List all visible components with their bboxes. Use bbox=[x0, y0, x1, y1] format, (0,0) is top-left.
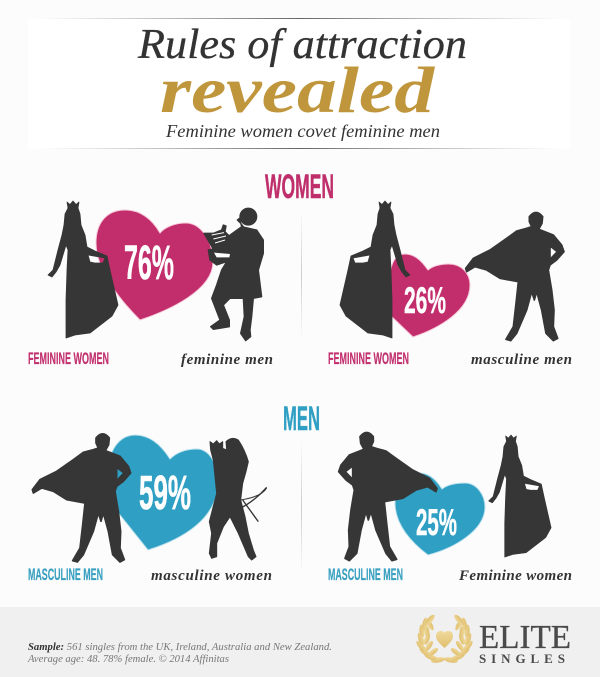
label: feminine women: FEMININE WOMEN bbox=[28, 350, 109, 368]
figure: archer bbox=[209, 438, 267, 560]
figure: princess bbox=[48, 201, 118, 338]
label: feminine men: feminine men bbox=[181, 352, 273, 368]
text: MEN bbox=[283, 400, 320, 438]
heading: women: WOMEN bbox=[265, 168, 334, 206]
icon: laurel wreath with heart bbox=[415, 613, 474, 664]
figure: caped hero bbox=[32, 434, 131, 562]
divider: men bbox=[301, 440, 302, 575]
sample note: Sample: 561 singles from the UK, Ireland, Australia and New Zealand. bbox=[28, 641, 332, 653]
label: feminine women: FEMININE WOMEN bbox=[328, 350, 409, 368]
percentage: 26%: 26% bbox=[404, 280, 446, 321]
percentage: 59%: 59% bbox=[139, 467, 191, 520]
divider: women bbox=[301, 210, 302, 340]
figure: caped hero bbox=[466, 212, 564, 341]
logo: elite singles bbox=[415, 613, 571, 666]
wordmark: ELITE bbox=[479, 619, 571, 656]
label: masculine men: masculine men bbox=[471, 352, 572, 368]
label: masculine men: MASCULINE MEN bbox=[328, 566, 403, 584]
wordmark subline: SINGLES bbox=[479, 651, 565, 666]
title: Rules of attraction bbox=[137, 22, 467, 68]
percentage: 25%: 25% bbox=[416, 502, 457, 543]
figure: caped hero bbox=[339, 432, 437, 561]
heart: 25% bbox=[395, 473, 485, 555]
sample note: Average age: 48. 78% female. © 2014 Affinitas bbox=[27, 653, 229, 665]
header panel bbox=[28, 18, 570, 149]
label: feminine women: Feminine women bbox=[458, 568, 572, 584]
sample note bbox=[27, 641, 332, 665]
panel: masculine men and feminine women bbox=[328, 432, 572, 584]
panel: masculine men and masculine women bbox=[28, 434, 272, 584]
label: masculine women: masculine women bbox=[151, 568, 272, 584]
figure: princess bbox=[489, 435, 551, 557]
panel: feminine women and feminine men bbox=[28, 201, 273, 368]
heart: 59% bbox=[110, 435, 218, 550]
footer bbox=[0, 607, 600, 677]
heart: 26% bbox=[390, 254, 470, 337]
label: masculine men: MASCULINE MEN bbox=[28, 566, 103, 584]
title emphasis: revealed: revealed bbox=[160, 54, 435, 127]
figure: musician with lyre bbox=[204, 208, 263, 341]
figure: princess bbox=[340, 201, 410, 338]
subtitle: Feminine women covet feminine men bbox=[165, 121, 440, 141]
heart: 76% bbox=[96, 210, 213, 320]
percentage: 76%: 76% bbox=[124, 237, 174, 290]
panel: feminine women and masculine men bbox=[328, 201, 572, 368]
